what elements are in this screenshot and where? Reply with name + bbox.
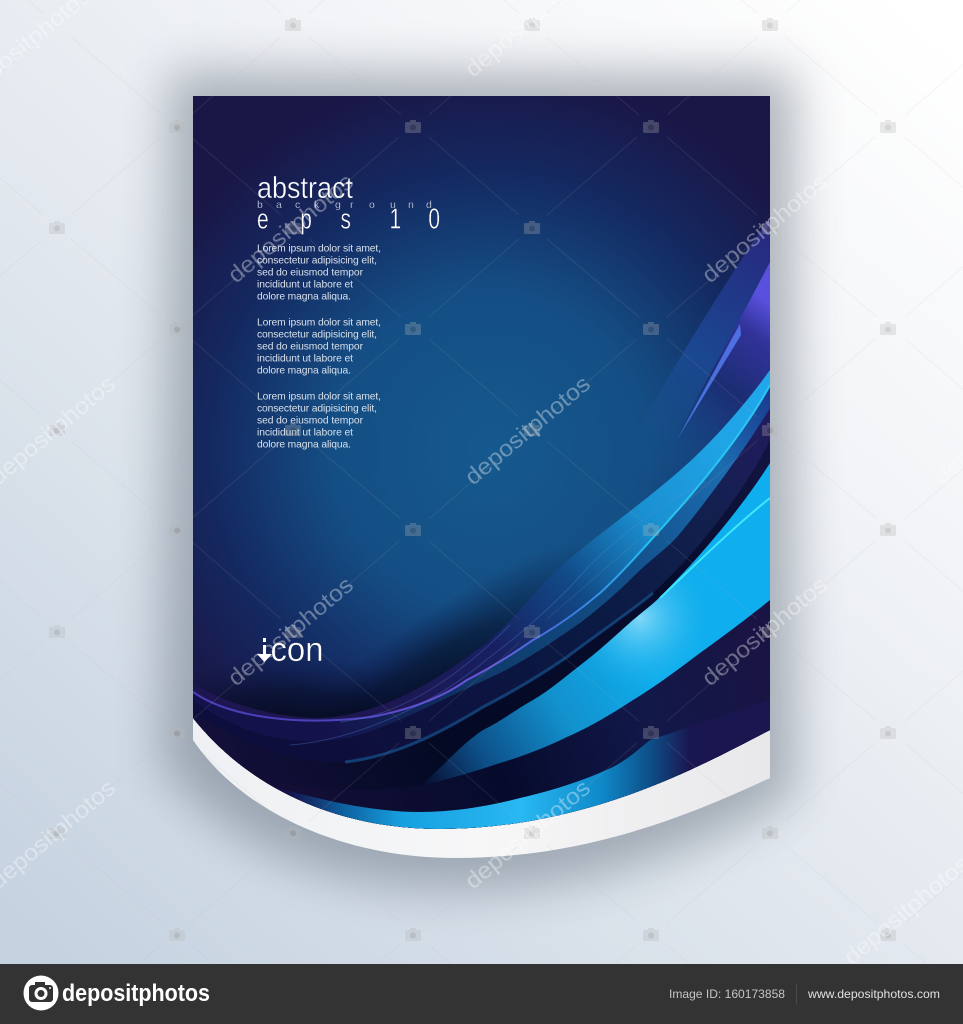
footer divider xyxy=(796,984,797,1004)
shadow over the waves xyxy=(336,557,570,716)
white curled sheet bottom xyxy=(193,700,770,858)
glowing wave line xyxy=(193,385,770,721)
bright blue bottom strip xyxy=(276,700,770,829)
translucent light beam xyxy=(654,217,770,456)
paragraph 2: consectetur adipisicing elit, xyxy=(257,330,377,340)
navy cover artwork xyxy=(193,96,770,829)
teal band below glowing line xyxy=(193,387,770,829)
sub-headline: background: background xyxy=(257,199,432,211)
thin blue stripe xyxy=(345,593,653,762)
footer logo wordmark: depositphotos xyxy=(62,980,210,1007)
paragraph 3: incididunt ut labore et xyxy=(257,428,353,438)
headline: abstract: abstract xyxy=(257,170,353,205)
footer bar xyxy=(0,964,963,1024)
faint arc lines xyxy=(290,482,705,745)
watermark text: depositphotos xyxy=(697,571,832,691)
paragraph 2: Lorem ipsum dolor sit amet, xyxy=(257,318,381,328)
paragraph 2: dolore magna aliqua. xyxy=(257,366,351,376)
bright cyan stripe xyxy=(660,498,770,598)
upper wave band xyxy=(193,370,770,829)
website url: www.depositphotos.com xyxy=(807,987,940,1001)
paragraph 1: sed do eiusmod tempor xyxy=(257,268,364,278)
icon logotype xyxy=(257,631,324,669)
paragraph 1: incididunt ut labore et xyxy=(257,280,353,290)
paragraph 1: consectetur adipisicing elit, xyxy=(257,256,377,266)
footer logo camera icon xyxy=(24,976,58,1010)
paragraph 2: sed do eiusmod tempor xyxy=(257,342,364,352)
lower navy area xyxy=(258,600,770,829)
watermark text: depositphotos xyxy=(460,370,595,490)
large cyan band xyxy=(420,463,770,786)
blue spike highlight xyxy=(677,324,741,440)
headline: eps 10: eps10 xyxy=(257,203,440,235)
paragraph 3: dolore magna aliqua. xyxy=(257,440,351,450)
black wave band xyxy=(194,440,770,829)
watermark text: depositphotos xyxy=(223,168,358,288)
sheet drop shadow xyxy=(160,72,795,890)
watermark camera icons xyxy=(49,18,896,941)
dark navy band xyxy=(193,408,770,829)
paragraph 3: consectetur adipisicing elit, xyxy=(257,404,377,414)
paragraph 3: sed do eiusmod tempor xyxy=(257,416,364,426)
paragraph 1: dolore magna aliqua. xyxy=(257,292,351,302)
paragraph 1: Lorem ipsum dolor sit amet, xyxy=(257,244,381,254)
watermark text: depositphotos xyxy=(223,571,358,691)
bright violet glow xyxy=(690,262,770,430)
icon word: con xyxy=(270,631,324,669)
brochure sheet xyxy=(193,96,770,858)
paragraph 2: incididunt ut labore et xyxy=(257,354,353,364)
watermark text: depositphotos xyxy=(697,168,832,288)
body text blocks xyxy=(257,244,381,450)
watermark text: depositphotos xyxy=(460,774,595,894)
image id: Image ID: 160173858 xyxy=(669,987,785,1001)
paragraph 3: Lorem ipsum dolor sit amet, xyxy=(257,392,381,402)
watermark text: depositphotos xyxy=(839,850,963,970)
left shadow above the waves xyxy=(194,668,373,776)
cyan band highlight xyxy=(595,578,696,674)
arrow glyph xyxy=(257,638,272,662)
